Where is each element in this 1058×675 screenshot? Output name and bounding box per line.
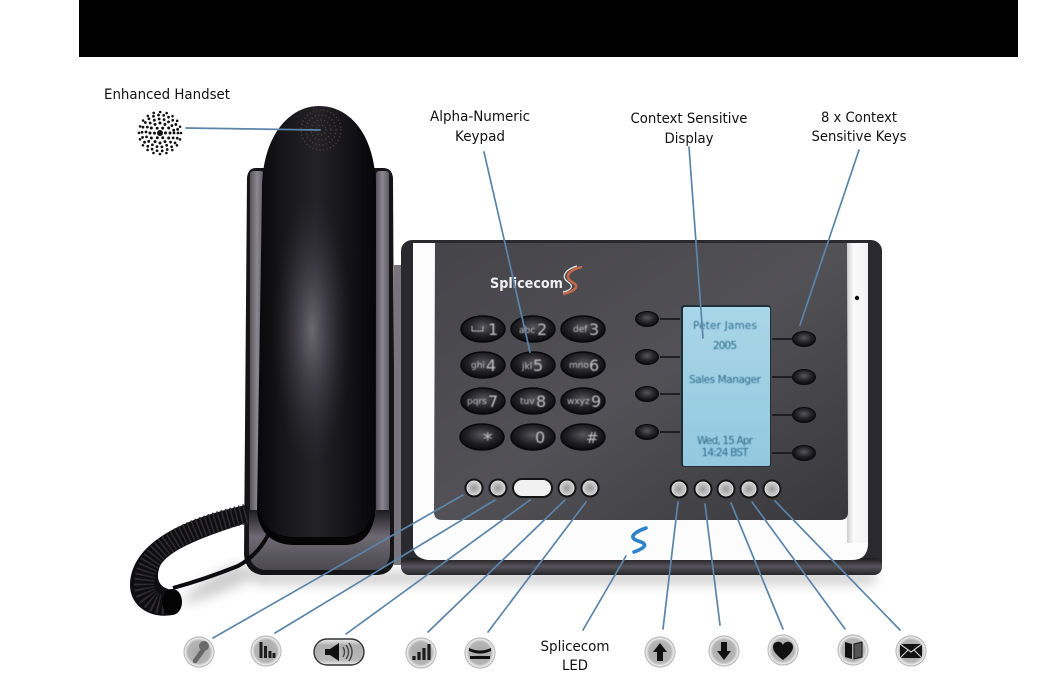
alpha-numeric keypad: 2 bbox=[537, 320, 547, 339]
handset bbox=[257, 106, 376, 545]
alpha-numeric keypad: def bbox=[573, 325, 588, 335]
context sensitive display: 14:24 BST bbox=[702, 447, 749, 459]
icon: heart bbox=[768, 634, 798, 666]
alpha-numeric keypad: wxyz bbox=[567, 397, 590, 407]
icon: microphone mute bbox=[184, 636, 214, 668]
icon: down arrow bbox=[708, 636, 740, 666]
phone cradle bbox=[244, 168, 402, 575]
right function buttons bbox=[670, 480, 780, 498]
drop shadows under phone bbox=[180, 565, 875, 605]
splicecom brand logo: Splicecom bbox=[490, 276, 563, 292]
callout leader lines bbox=[186, 128, 900, 638]
icon: signal bars bbox=[406, 638, 436, 668]
heading: Alpha-Numeric Keypad: Keypad bbox=[455, 129, 505, 145]
alpha-numeric keypad: 3 bbox=[589, 320, 599, 339]
icon: speaker pill bbox=[314, 639, 364, 665]
left function buttons bbox=[466, 479, 598, 497]
right soft keys bbox=[772, 332, 816, 460]
alpha-numeric keypad: # bbox=[586, 429, 599, 447]
heading: 8 x Context Sensitive Keys: 8 x Context bbox=[821, 110, 897, 126]
icon: volume level bars bbox=[250, 636, 282, 666]
alpha-numeric keypad: mno bbox=[569, 361, 589, 371]
heading: Splicecom LED bbox=[540, 639, 610, 674]
splicecom led bbox=[633, 528, 646, 552]
heading: Context Sensitive Display: Context Sensitive bbox=[630, 111, 748, 127]
heading: Context Sensitive Display bbox=[630, 111, 748, 147]
icon: handset speaker dots bbox=[139, 112, 181, 154]
heading: Splicecom LED: LED bbox=[562, 658, 588, 674]
phone base unit bbox=[401, 240, 882, 575]
icon: book bbox=[838, 634, 868, 666]
alpha-numeric keypad: ghi bbox=[471, 361, 485, 371]
heading: Alpha-Numeric Keypad: Alpha-Numeric bbox=[430, 109, 530, 125]
heading: Context Sensitive Display: Display bbox=[664, 131, 714, 147]
context sensitive display bbox=[681, 305, 771, 467]
alpha-numeric keypad: 6 bbox=[589, 356, 599, 375]
alpha-numeric keypad: jkl bbox=[521, 362, 532, 372]
alpha-numeric keypad bbox=[460, 316, 605, 451]
icon: earpiece perforations bbox=[301, 110, 341, 150]
context sensitive display: Sales Manager bbox=[689, 374, 762, 386]
icon: envelope bbox=[896, 636, 926, 666]
alpha-numeric keypad: pqrs bbox=[467, 397, 487, 407]
alpha-numeric keypad: tuv bbox=[520, 397, 535, 407]
splicecom brand logo bbox=[490, 266, 582, 294]
alpha-numeric keypad: 0 bbox=[535, 428, 545, 447]
dark control panel bbox=[434, 243, 848, 520]
alpha-numeric keypad: 8 bbox=[536, 392, 546, 411]
alpha-numeric keypad: 1 bbox=[488, 320, 498, 339]
context sensitive display: Peter James bbox=[693, 320, 757, 332]
icon: headset cradle bbox=[464, 638, 496, 668]
alpha-numeric keypad: abc bbox=[519, 326, 535, 336]
heading: Splicecom LED: Splicecom bbox=[540, 639, 610, 655]
context sensitive display: Wed, 15 Apr bbox=[697, 435, 754, 447]
alpha-numeric keypad: 7 bbox=[488, 392, 498, 411]
context sensitive display: 2005 bbox=[713, 340, 737, 352]
white fascia bbox=[413, 243, 868, 560]
alpha-numeric keypad: 4 bbox=[486, 356, 496, 375]
icon: up arrow bbox=[644, 636, 676, 668]
alpha-numeric keypad: 5 bbox=[533, 356, 543, 375]
coiled handset cord bbox=[130, 505, 273, 616]
alpha-numeric keypad: 9 bbox=[591, 392, 601, 411]
heading: 8 x Context Sensitive Keys bbox=[812, 110, 906, 145]
left soft keys bbox=[636, 312, 680, 440]
heading: 8 x Context Sensitive Keys: Sensitive Keys bbox=[812, 129, 906, 145]
black header banner bbox=[79, 0, 1018, 57]
status pinhole bbox=[855, 296, 859, 300]
heading: Enhanced Handset: Enhanced Handset bbox=[104, 87, 230, 103]
alpha-numeric keypad: * bbox=[483, 429, 492, 451]
heading: Alpha-Numeric Keypad bbox=[430, 109, 530, 145]
